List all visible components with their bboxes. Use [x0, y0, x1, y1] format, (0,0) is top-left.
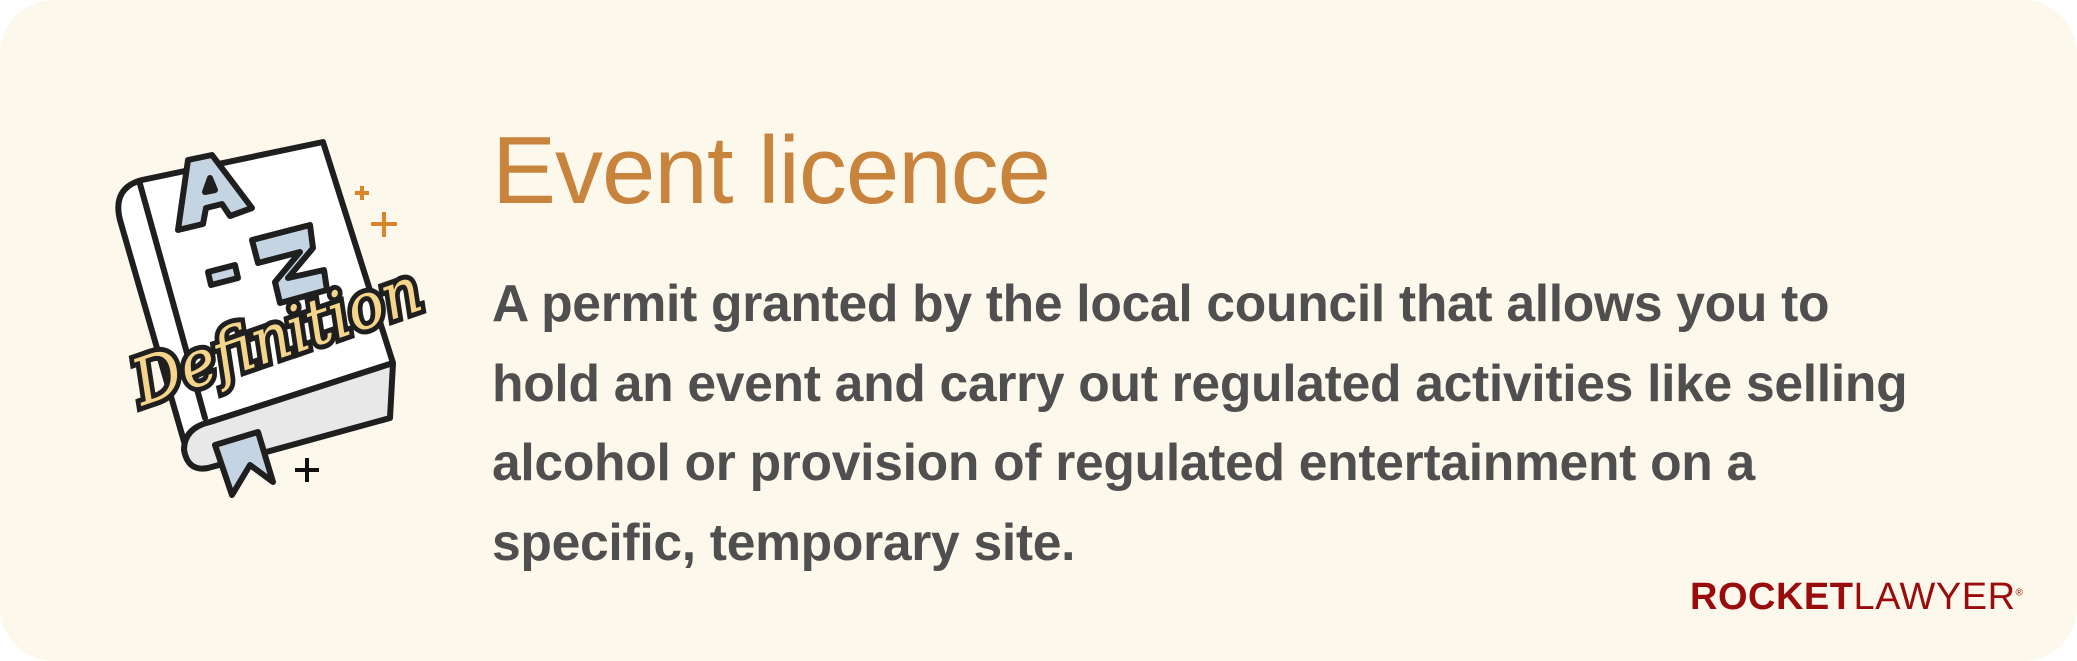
definition text: specific, temporary site.	[492, 512, 1075, 570]
definition text: A permit granted by the local council that allows you to	[492, 274, 1829, 332]
definition text	[492, 274, 1907, 571]
icon text: Definition: Definition	[122, 253, 431, 421]
logo: Rocket Lawyer: ROCKETLAWYER®	[1690, 576, 2023, 618]
definition text: alcohol or provision of regulated entertainment on a	[492, 433, 1755, 491]
title: Event licence	[492, 117, 1050, 224]
icon: A-Z definition book	[115, 139, 431, 498]
definition text: hold an event and carry out regulated activities like selling	[492, 354, 1907, 412]
